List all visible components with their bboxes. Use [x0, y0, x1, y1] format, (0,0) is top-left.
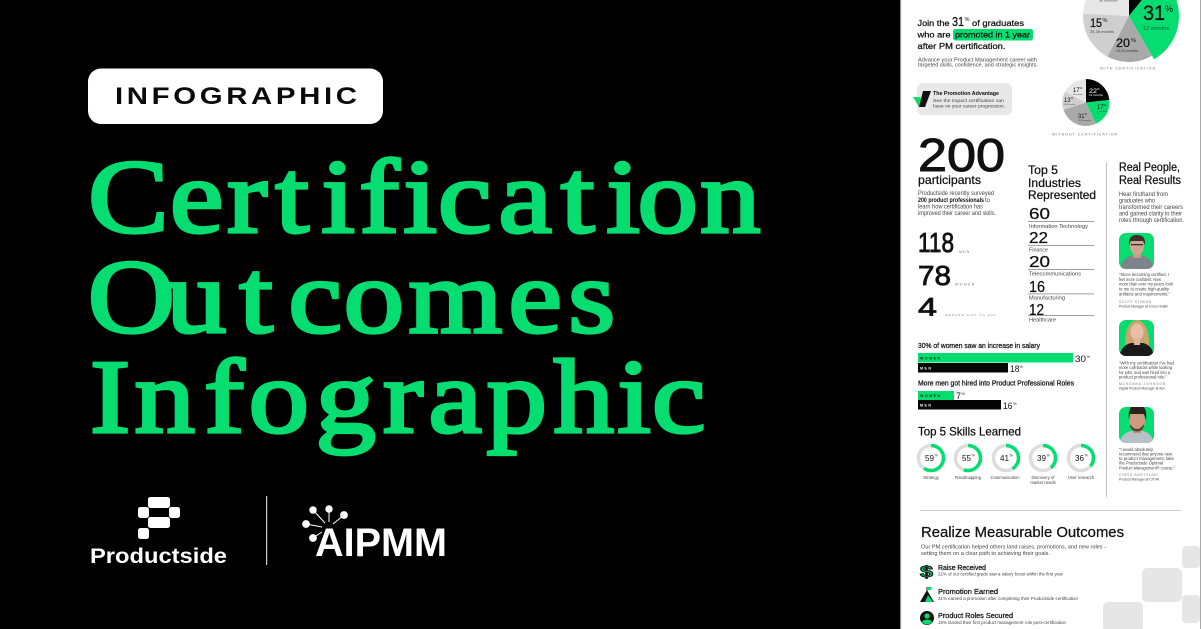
infographic pill [88, 68, 383, 124]
donut: user research 36%: % [1084, 454, 1088, 458]
stat: 118 men: 118 [918, 227, 954, 258]
pie chart: without certification: WITHOUT CERTIFICATION [1052, 132, 1118, 136]
industry: telecommunications: 20 [1029, 254, 1050, 271]
pie chart: without certification: 17 [1073, 88, 1080, 94]
skills section [918, 424, 1095, 485]
donut: discovery of market needs 39%: 39 [1037, 453, 1046, 463]
testimonial: McKenna Johnson: for jobs, and was hired into a [1119, 370, 1171, 375]
main title [88, 139, 760, 455]
donut: communication 41%: Communication [990, 475, 1020, 480]
testimonial: Chris Bartylski: "I would absolutely [1119, 447, 1154, 452]
outcomes description: Our PM certification helped others land raises, promotions, and new roles - [921, 545, 1106, 551]
testimonial: Chris Bartylski: Product Management® course." [1119, 466, 1175, 470]
testimonial: Scott Stokes: to me to create high-quality [1119, 286, 1170, 292]
real people heading [1119, 162, 1181, 187]
industries heading [1028, 163, 1096, 202]
participants description [918, 191, 996, 217]
testimonial: Scott Stokes [1119, 233, 1174, 308]
outcome: product roles secured: Product Roles Secured [938, 613, 1013, 620]
bar chart: salary increase: % [1020, 364, 1024, 369]
intro heading [916, 15, 1033, 51]
bar chart: product roles: More men got hired into Product Professional Roles [918, 378, 1074, 388]
bar chart: salary increase: WOMEN [920, 356, 940, 360]
bar chart: salary increase: MEN [920, 366, 931, 370]
pie chart: with certification: % [1165, 4, 1173, 14]
pie chart: with certification: 15 [1090, 16, 1102, 30]
donut: strategy 59% [918, 446, 944, 480]
stat: 4 prefer not to say: 4 [918, 292, 937, 323]
donut: user research 36% [1068, 446, 1095, 480]
promotion advantage card [913, 83, 1012, 115]
pie chart: without certification: % [1070, 96, 1074, 100]
industry: manufacturing [1028, 279, 1094, 302]
promotion advantage card: See the impact certification can [933, 98, 1004, 104]
industry: healthcare [1028, 302, 1094, 324]
Productside logo: Productside [90, 545, 227, 568]
donut: roadmapping 55% [955, 446, 982, 480]
bar chart: salary increase: 18 [1010, 364, 1020, 375]
intro heading: 31 [952, 15, 964, 29]
testimonial: Scott Stokes: feel more confident. Now [1119, 277, 1162, 282]
stat: 78 women [918, 260, 975, 291]
icon: dollar sign: $ [920, 564, 933, 581]
bar chart: product roles: 16 [1003, 401, 1012, 412]
industry: information technology: 60 [1029, 206, 1050, 223]
industry: healthcare: 12 [1029, 302, 1044, 319]
testimonials divider [1105, 162, 1108, 497]
portrait [1119, 320, 1154, 356]
testimonial: Scott Stokes: more than ever my peers look [1119, 282, 1174, 286]
donut: roadmapping 55%: 55 [962, 453, 971, 463]
testimonial: Chris Bartylski: CHRIS BARTYLSKI [1119, 473, 1159, 477]
stat: 78 women: WOMEN [955, 282, 975, 286]
pie chart: without certification: 13-24 months [1078, 119, 1092, 122]
outcome: raise received: 22% of our certified grads saw a salary boost within the first year [938, 572, 1064, 576]
intro heading: Join the [918, 18, 950, 28]
intro heading: % [964, 17, 970, 23]
real people heading: Real Results [1119, 175, 1181, 187]
outcomes description [921, 545, 1106, 557]
donut: communication 41% [990, 446, 1020, 480]
stat: 78 women: 78 [918, 260, 951, 291]
donut: user research 36%: User research [1068, 475, 1095, 480]
bar chart: product roles: % [1013, 401, 1017, 406]
AIPMM logo [302, 505, 447, 565]
testimonial: Scott Stokes: "Since becoming certified, I [1119, 272, 1169, 277]
real people description: graduates who [1119, 198, 1156, 204]
pie chart: without certification: 22 [1089, 88, 1097, 95]
testimonial: Chris Bartylski: the Productside Optimal [1119, 460, 1163, 466]
real people description: Hear firsthand from [1119, 192, 1168, 198]
outcome: raise received [920, 564, 1064, 581]
donut: strategy 59%: % [934, 454, 938, 458]
donut: discovery of market needs 39%: % [1046, 454, 1050, 458]
infographic pill: INFOGRAPHIC [115, 82, 357, 109]
industry: manufacturing: Manufacturing [1029, 296, 1065, 302]
outcomes heading: Realize Measurable Outcomes [921, 525, 1124, 541]
pie chart: without certification: % [1097, 87, 1100, 91]
real people description [1119, 192, 1184, 224]
outcome: promotion earned: Promotion Earned [938, 589, 998, 596]
pie chart: with certification: 25-36 months [1090, 30, 1114, 34]
industry: information technology: Information Technology [1029, 224, 1088, 230]
intro heading: of graduates [972, 18, 1024, 28]
donut: strategy 59%: 59 [925, 453, 934, 463]
bar chart: product roles [918, 378, 1074, 412]
decorative blocks [1103, 546, 1200, 629]
donut: discovery of market needs 39% [1030, 446, 1056, 485]
intro heading: promoted in 1 year [955, 30, 1030, 40]
donut: communication 41%: % [1010, 454, 1013, 458]
testimonial: McKenna Johnson: Digital Product Manager at Aon [1119, 386, 1165, 390]
promotion advantage card: The Promotion Advantage [933, 91, 999, 97]
testimonial: McKenna Johnson [1119, 320, 1175, 390]
stat: 4 prefer not to say: PREFER NOT TO SAY [945, 314, 997, 318]
stat: 118 men: MEN [959, 250, 970, 254]
bar chart: product roles: WOMEN [920, 394, 940, 398]
donut: roadmapping 55%: % [972, 454, 975, 458]
real people description: roles through certification. [1119, 218, 1184, 224]
left hero panel [88, 68, 760, 568]
Productside logo [90, 497, 227, 568]
intro heading: after PM certification. [918, 41, 1006, 51]
bar chart: salary increase [918, 341, 1090, 375]
industry: telecommunications [1028, 254, 1094, 278]
intro heading: who are [916, 30, 951, 40]
testimonial: Chris Bartylski: recommend that anyone new [1119, 452, 1173, 456]
real people heading: Real People, [1119, 162, 1180, 174]
industry: finance: Finance [1029, 248, 1048, 254]
pie chart: without certification: 25-36 months [1064, 103, 1076, 106]
pie chart: without certification: 12 months [1089, 94, 1104, 97]
icon: mountain flag [920, 587, 934, 602]
participants description: to [985, 198, 991, 204]
outcome: promotion earned: 31% earned a promotion after completing their Productside certification [938, 596, 1079, 601]
testimonial: McKenna Johnson: product professional role." [1119, 374, 1167, 380]
bar chart: salary increase: 30 [1075, 354, 1086, 365]
pie chart: with certification: WITH CERTIFICATION [1100, 66, 1156, 70]
bar chart: product roles: MEN [920, 404, 931, 408]
pie chart: with certification [1083, 0, 1179, 70]
testimonial: Scott Stokes: artifacts and requirements." [1119, 292, 1170, 296]
real people section [1119, 162, 1184, 482]
panel edge [900, 0, 901, 629]
industries heading: Industries [1028, 176, 1081, 190]
testimonial: Chris Bartylski: to product management, take [1119, 456, 1175, 461]
industry: manufacturing: 16 [1029, 279, 1045, 296]
industry: information technology [1028, 206, 1094, 230]
pie chart: with certification: % [1131, 38, 1137, 44]
donut: discovery of market needs 39%: market needs [1030, 480, 1056, 485]
testimonial: McKenna Johnson: more call-backs while looking [1119, 365, 1173, 370]
pie chart: without certification: % [1080, 86, 1082, 90]
donut: discovery of market needs 39%: Discovery of [1031, 475, 1055, 480]
donut: strategy 59%: Strategy [923, 475, 940, 480]
industry: finance: 22 [1029, 230, 1048, 247]
donut: roadmapping 55%: Roadmapping [955, 475, 982, 480]
icon: person [920, 611, 934, 625]
main title: Certification [88, 139, 760, 255]
portrait [1119, 404, 1154, 443]
participants description: Productside recently surveyed [918, 191, 994, 197]
pie chart: without certification: 31 [1078, 114, 1085, 120]
intro text [918, 58, 1038, 68]
main title: Infographic [90, 339, 706, 455]
intro text: Advance your Product Management career with [918, 58, 1037, 64]
testimonial: Chris Bartylski: Product Manager at CITVA [1119, 478, 1159, 482]
pie chart: with certification: 12 months [1143, 26, 1169, 32]
participants section [918, 129, 1005, 323]
bar chart: product roles: % [962, 391, 966, 396]
pie chart: without certification: % [1084, 112, 1088, 116]
testimonial: McKenna Johnson: MCKENNA JOHNSON [1119, 382, 1166, 386]
outcome: product roles secured [920, 611, 1067, 625]
pie chart: without certification: 17 [1097, 105, 1104, 111]
participants description: learn how certification has [918, 204, 983, 210]
pie chart: with certification: % [1102, 18, 1108, 24]
pie chart: with certification: 31 [1143, 2, 1165, 25]
black background [0, 0, 901, 629]
testimonial: Chris Bartylski [1119, 404, 1175, 482]
intro text: targeted skills, confidence, and strategic insights. [918, 62, 1038, 68]
right edge [1200, 0, 1201, 629]
participants label: participants [918, 173, 981, 187]
white panel background [901, 0, 1201, 629]
outcome: product roles secured: 15% landed their first product management role post-certification [938, 620, 1067, 625]
pie chart: without certification: 12 months [1097, 110, 1108, 113]
pie chart: without certification: 36 months+ [1073, 93, 1084, 96]
icon: check mark [913, 91, 931, 107]
industries heading: Top 5 [1028, 163, 1058, 177]
pie chart: with certification: 20 [1116, 36, 1130, 50]
testimonial: Scott Stokes: SCOTT STOKES [1119, 300, 1152, 304]
stat: 4 prefer not to say [918, 298, 996, 316]
portrait [1119, 233, 1154, 269]
participants description: 200 product professionals [918, 198, 985, 204]
promotion advantage card: have on your career progression. [933, 104, 1005, 110]
big number 200: 200 [918, 129, 1005, 181]
AIPMM logo: AIPMM [315, 521, 447, 565]
outcome: raise received: Raise Received [938, 565, 986, 572]
industry: finance [1028, 230, 1094, 254]
bar chart: salary increase: % [1086, 354, 1090, 359]
donut: communication 41%: 41 [1000, 453, 1009, 463]
skills heading: Top 5 Skills Learned [918, 424, 1021, 438]
pie chart: without certification [1052, 79, 1118, 136]
participants description: improved their career and skills. [918, 211, 996, 217]
industries heading: Represented [1028, 188, 1096, 202]
testimonial: McKenna Johnson: "With my certification I've had [1119, 360, 1175, 366]
testimonial: Scott Stokes: Product Manager at Cirrus Health [1119, 304, 1168, 308]
industry: healthcare: Healthcare [1029, 318, 1056, 324]
pie chart: without certification: 13 [1064, 98, 1071, 104]
top 5 industries section [1028, 163, 1096, 324]
real people description: transformed their careers [1119, 205, 1183, 211]
logo divider [266, 496, 267, 565]
bar chart: product roles: 7 [956, 391, 961, 402]
outcomes description: setting them on a clear path to achieving their goals. [921, 551, 1050, 557]
section divider [920, 509, 1181, 512]
industry: telecommunications: Telecommunications [1029, 272, 1081, 278]
pie chart: without certification: % [1104, 103, 1106, 107]
donut: user research 36%: 36 [1075, 453, 1084, 463]
real people description: and gained clarity in their [1119, 212, 1182, 218]
main title: Outcomes [88, 239, 615, 355]
right infographic panel [900, 0, 1201, 629]
bar chart: salary increase: 30% of women saw an increase in salary [918, 341, 1040, 350]
pie chart: with certification: 13-24 months [1116, 49, 1138, 53]
outcome: promotion earned [920, 587, 1079, 602]
outcomes section [920, 525, 1124, 625]
